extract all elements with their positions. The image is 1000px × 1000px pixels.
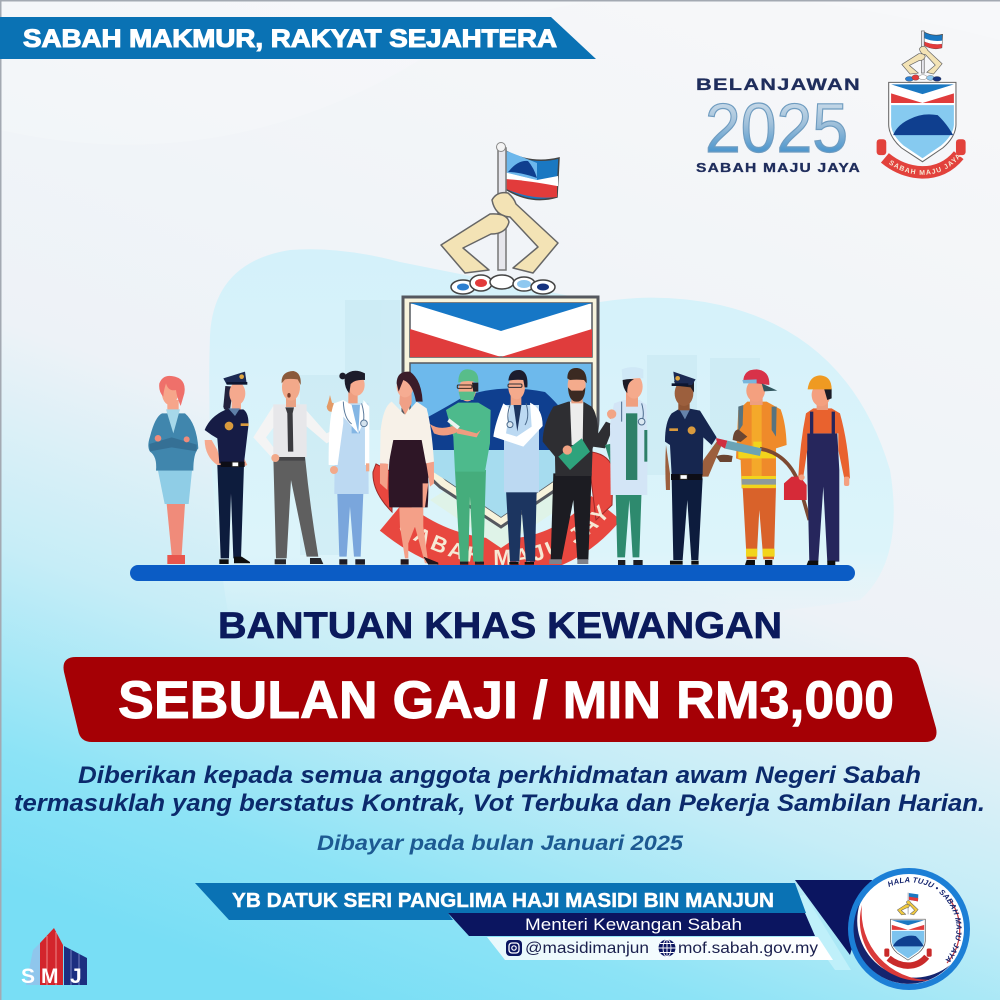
minister block [195, 880, 872, 970]
small coat of arms [876, 30, 966, 179]
logo: Belanjawan 2025: 2025 [705, 89, 848, 167]
ground bar [130, 565, 855, 581]
minister block: mof.sabah.gov.my [678, 940, 818, 957]
SMJ logo: M [41, 965, 58, 988]
large coat of arms [372, 142, 616, 565]
background blob with city [209, 249, 894, 625]
ribbon [372, 452, 616, 565]
icon: globe [658, 940, 676, 956]
top banner [0, 17, 596, 59]
worker: man in white shirt and tie [253, 371, 335, 564]
beads [451, 275, 555, 294]
SMJ logo: J [70, 965, 82, 988]
worker: police officer [665, 372, 722, 565]
small coat of arms: SABAH MAJU JAYA [889, 154, 961, 175]
logo: Belanjawan 2025: BELANJAWAN [696, 75, 861, 94]
SMJ logo: S [21, 965, 35, 988]
hands holding the pole [441, 193, 558, 273]
round emblem: Hala Tuju: HALA TUJU • SABAH MAJU JAYA [888, 877, 962, 962]
shield [403, 297, 598, 548]
icon: instagram [506, 940, 522, 956]
worker: doctor in green scrubs [605, 367, 647, 565]
worker: firefighter with hose [716, 369, 809, 565]
heading: BANTUAN KHAS KEWANGAN [218, 605, 782, 646]
group of workers [148, 367, 850, 565]
payment date: Dibayar pada bulan Januari 2025 [317, 832, 683, 855]
small crest in emblem [884, 893, 932, 966]
description text: Diberikan kepada semua anggota perkhidmatan awam Negeri Sabah [78, 762, 921, 789]
description text: termasuklah yang berstatus Kontrak, Vot Terbuka dan Pekerja Sambilan Harian. [14, 790, 985, 817]
minister block: @masidimanjun [525, 940, 649, 957]
worker: woman in blue blazer [148, 376, 198, 564]
minister block: YB DATUK SERI PANGLIMA HAJI MASIDI BIN MANJUN [232, 890, 774, 912]
flag [504, 150, 559, 200]
worker: police woman [205, 372, 250, 564]
round emblem: Hala Tuju [848, 868, 970, 990]
worker: surgeon [430, 369, 491, 565]
minister block: Menteri Kewangan Sabah [525, 915, 742, 934]
worker: male doctor with glasses [493, 370, 543, 565]
worker: bearded man with folder [543, 368, 616, 564]
flag pole [496, 142, 506, 270]
worker: woman in dark skirt [380, 372, 438, 565]
SMJ logo [21, 928, 87, 988]
red banner [64, 657, 937, 742]
worker: orange helmet labourer with toolbox [784, 375, 850, 565]
worker: female doctor [329, 371, 369, 565]
description text [14, 762, 985, 817]
top banner: SABAH MAKMUR, RAKYAT SEJAHTERA [23, 25, 557, 53]
red banner: SEBULAN GAJI / MIN RM3,000 [118, 671, 894, 730]
logo: Belanjawan 2025: SABAH MAJU JAYA [696, 160, 861, 175]
